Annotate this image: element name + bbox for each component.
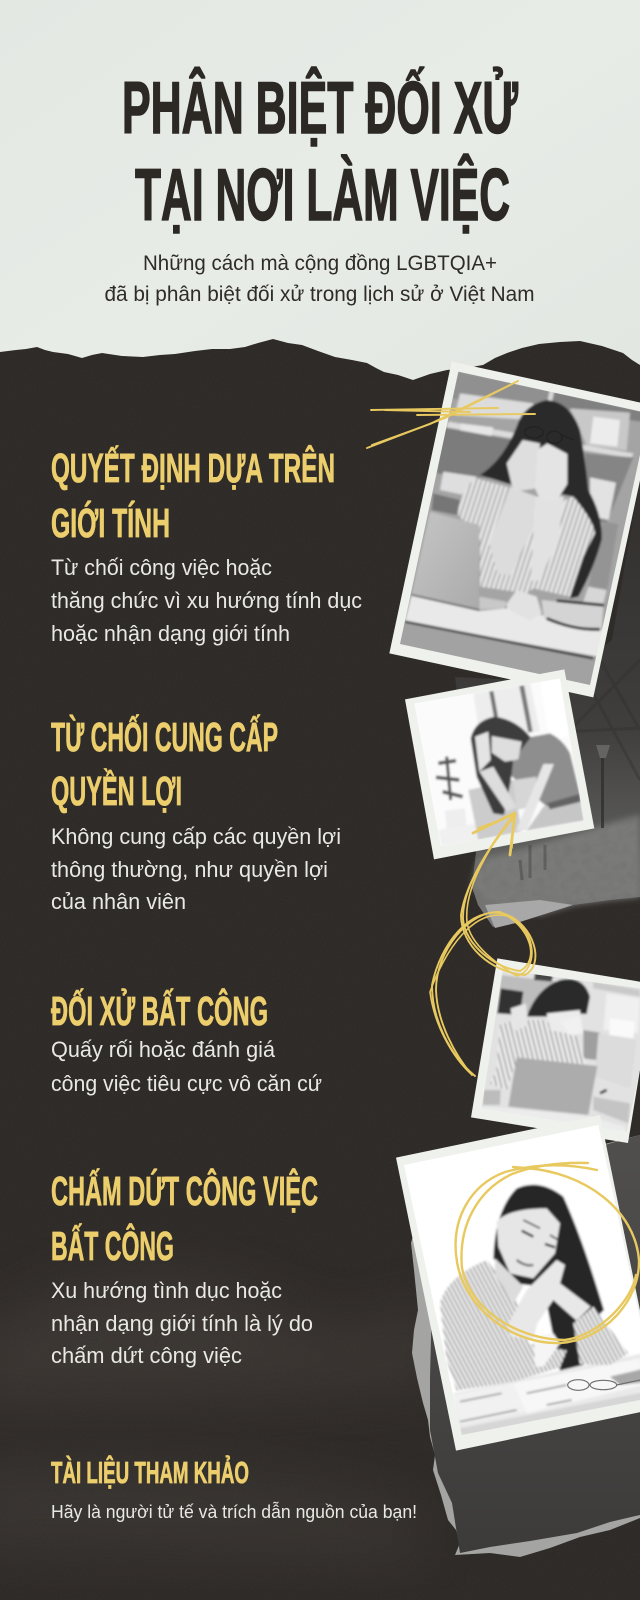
section 2: refusing benefits	[51, 714, 341, 914]
body text: công việc tiêu cực vô căn cứ	[51, 1071, 322, 1096]
section 3: unfair treatment	[51, 988, 322, 1096]
body text: thông thường, như quyền lợi	[51, 857, 328, 882]
background: grey landscape torn paper, upper	[455, 480, 640, 928]
background: light paper	[0, 0, 640, 420]
body text: Quấy rối hoặc đánh giá	[51, 1037, 276, 1062]
heading	[51, 445, 335, 546]
body text: của nhân viên	[51, 889, 186, 914]
heading: QUYỀN LỢI	[51, 768, 182, 814]
section 1: decision based on gender	[51, 445, 362, 646]
title	[122, 67, 518, 236]
body text: Xu hướng tình dục hoặc	[51, 1278, 282, 1303]
photo 3: woman with glasses at laptop	[471, 958, 640, 1143]
references	[51, 1454, 417, 1522]
heading: TỪ CHỐI CUNG CẤP	[51, 714, 278, 760]
subtitle: Những cách mà cộng đồng LGBTQIA+	[143, 251, 497, 275]
heading: GIỚI TÍNH	[51, 500, 170, 546]
photo 2: woman holding head on sofa	[400, 669, 600, 859]
body text	[51, 555, 362, 646]
scribble: yellow circle around woman	[456, 1163, 639, 1343]
photo 1: woman covering her face at laptop	[389, 360, 640, 697]
icon: lamp post	[596, 745, 610, 828]
heading	[51, 1168, 318, 1269]
glasses	[525, 427, 574, 443]
references heading: TÀI LIỆU THAM KHẢO	[51, 1454, 249, 1490]
body text	[51, 824, 341, 914]
heading: QUYẾT ĐỊNH DỰA TRÊN	[51, 445, 335, 491]
background: torn dark paper	[0, 330, 640, 1600]
heading: BẤT CÔNG	[51, 1223, 174, 1269]
references text: Hãy là người tử tế và trích dẫn nguồn của bạn!	[51, 1501, 417, 1522]
scribble: yellow strike lines	[367, 381, 535, 448]
body text: nhận dạng giới tính là lý do	[51, 1311, 313, 1336]
body text: Không cung cấp các quyền lợi	[51, 824, 341, 849]
body text: thăng chức vì xu hướng tính dục	[51, 588, 362, 613]
subtitle	[104, 251, 534, 306]
subtitle: đã bị phân biệt đối xử trong lịch sử ở Việt Nam	[104, 282, 534, 306]
body text	[51, 1037, 322, 1096]
photo 4: woman resting head on hands	[393, 1115, 640, 1451]
body text: chấm dứt công việc	[51, 1343, 242, 1368]
glasses on desk	[568, 1380, 640, 1390]
background: grey torn paper, lower	[411, 1135, 640, 1557]
heading: ĐỐI XỬ BẤT CÔNG	[51, 988, 268, 1034]
body text	[51, 1278, 313, 1368]
section 4: unfair termination	[51, 1168, 318, 1368]
body text: Từ chối công việc hoặc	[51, 555, 272, 580]
heading	[51, 714, 278, 814]
arrow: yellow looped arrow	[430, 813, 535, 1076]
body text: hoặc nhận dạng giới tính	[51, 621, 290, 646]
heading: CHẤM DỨT CÔNG VIỆC	[51, 1168, 318, 1214]
